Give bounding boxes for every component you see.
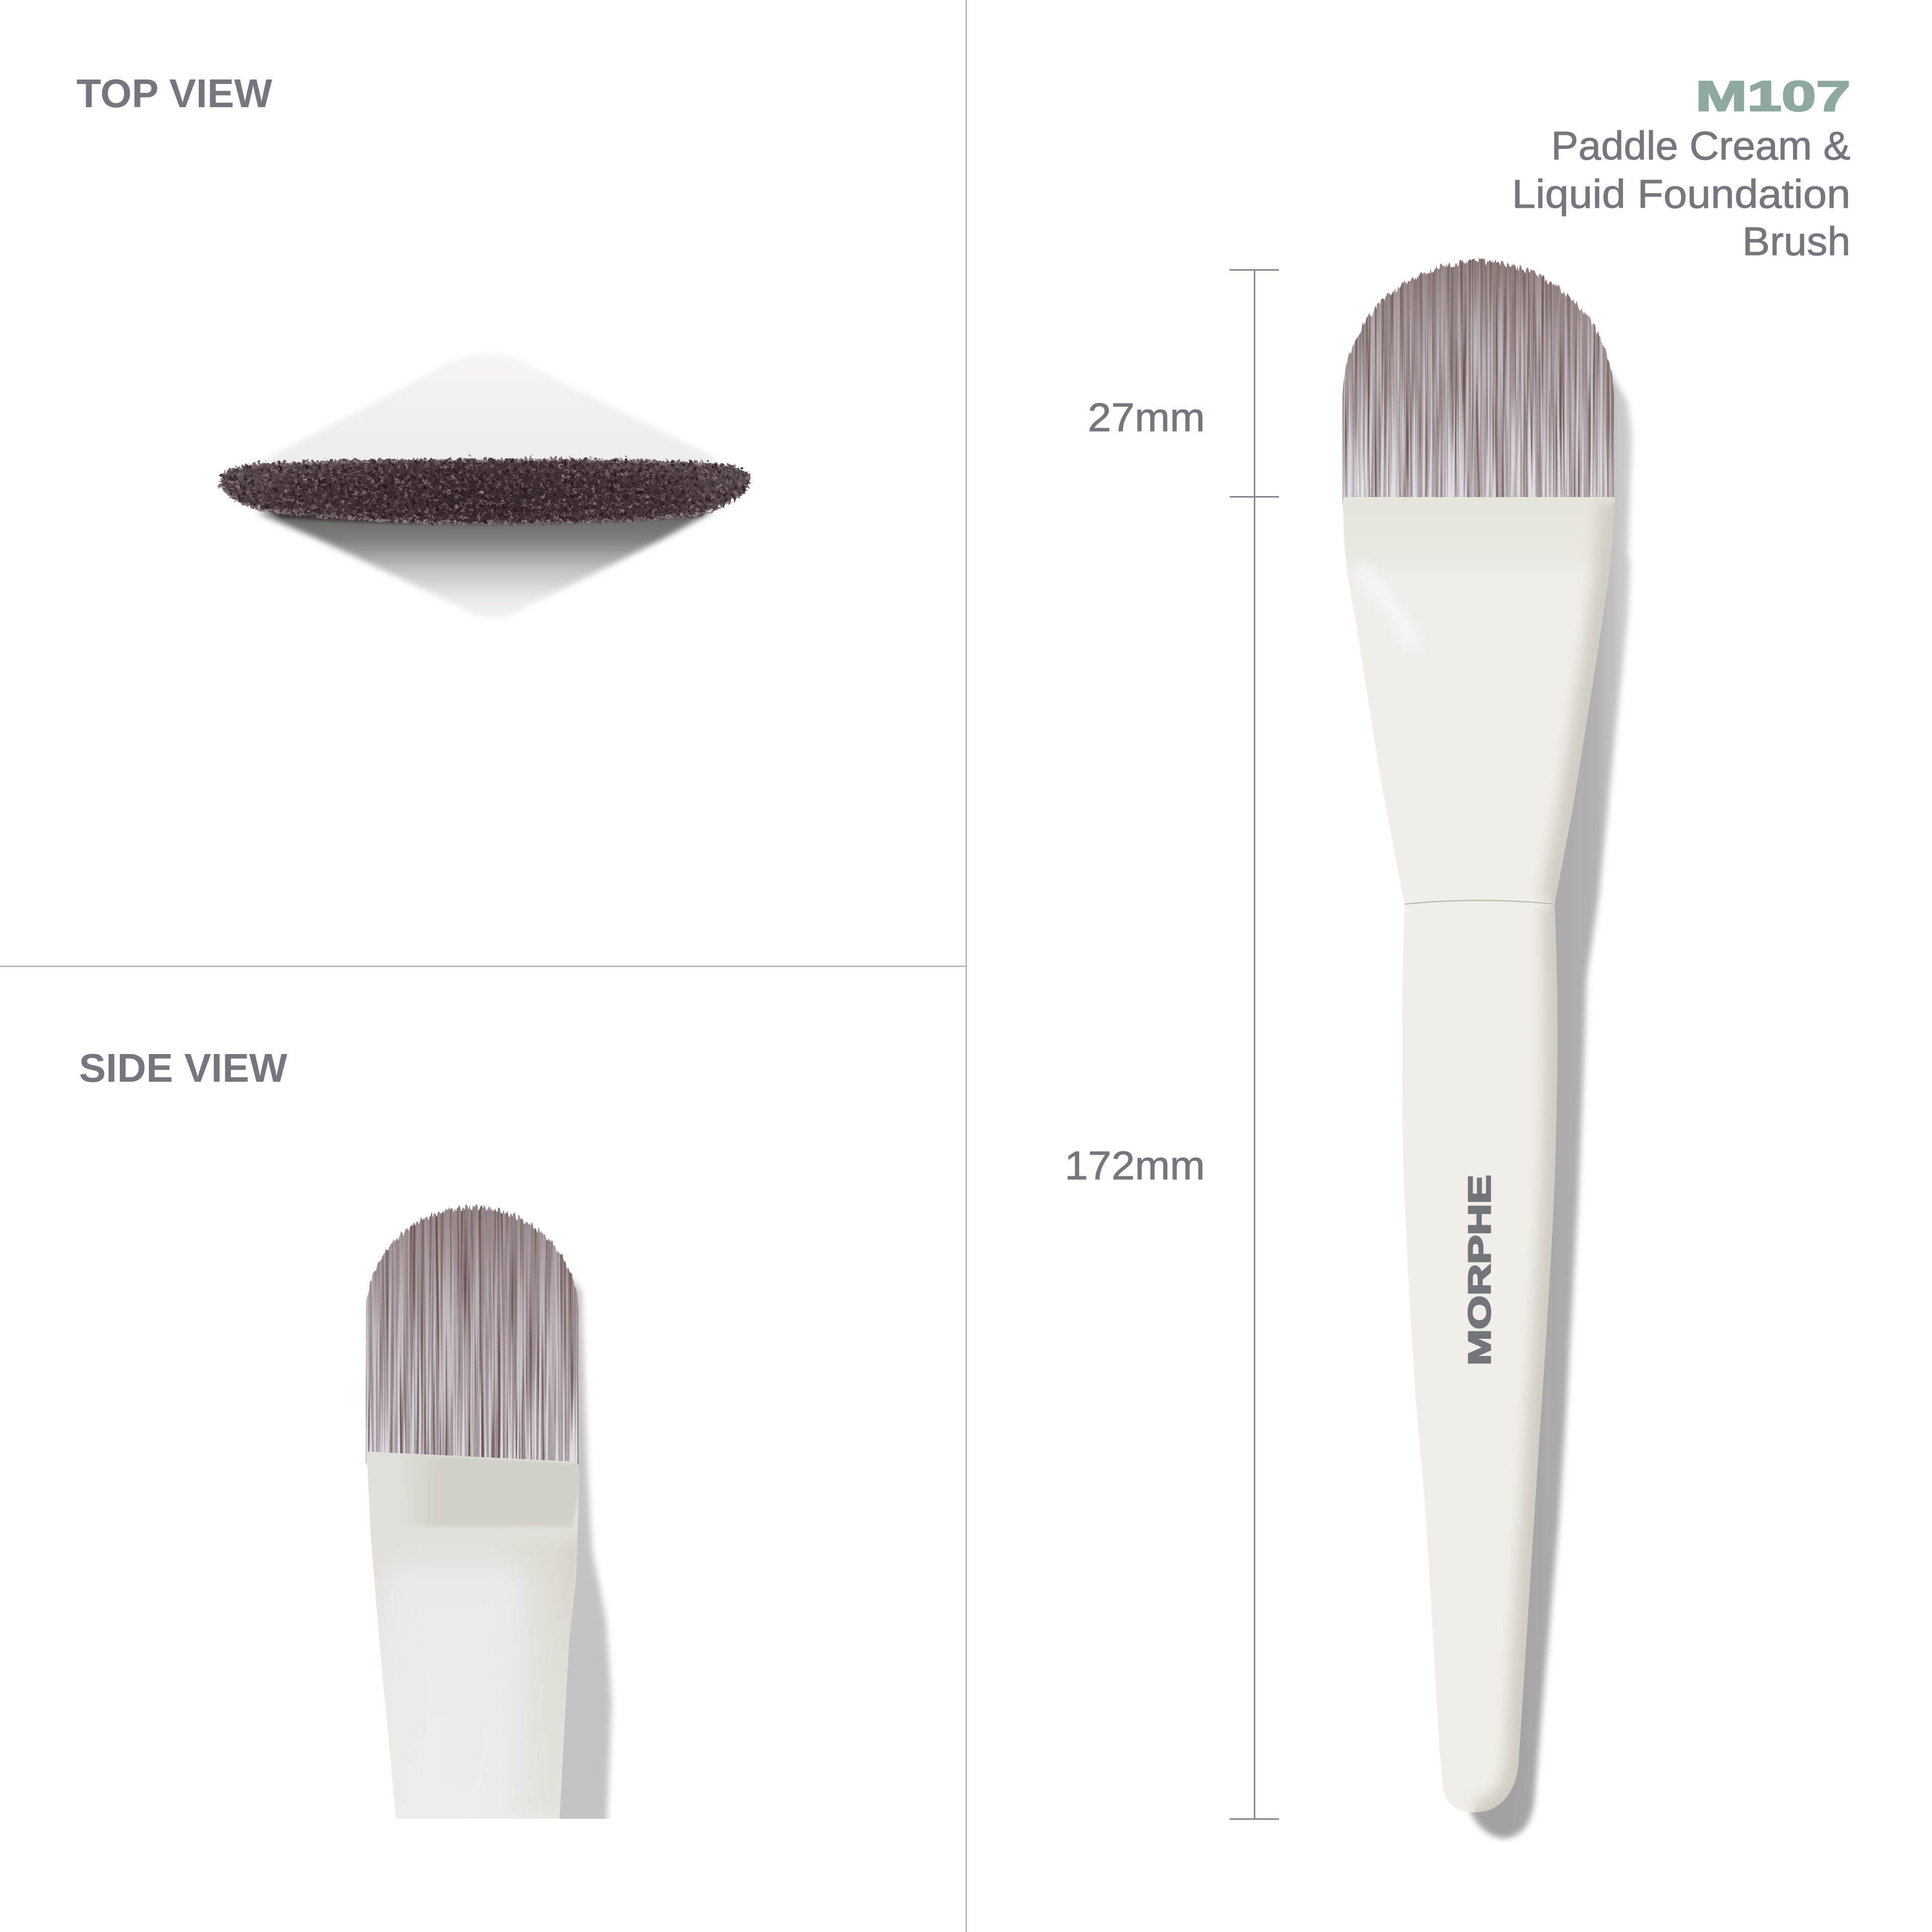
- product name: Brush: [1742, 219, 1850, 264]
- cast shadow: [1470, 367, 1632, 1838]
- product name: [1512, 123, 1850, 264]
- heading: side view: SIDE VIEW: [79, 1045, 287, 1090]
- ferrule top band shade: [1343, 497, 1615, 557]
- ferrule: [1343, 497, 1615, 904]
- handle right rim: [1476, 904, 1557, 1812]
- handle: [1402, 901, 1557, 1812]
- label: bristle length: 27mm: [1088, 395, 1205, 440]
- panel: top view of brush: [219, 354, 748, 618]
- ferrule body: [367, 1452, 580, 1819]
- panel divider: vertical: [965, 0, 967, 1932]
- dark edge below bristles: [262, 506, 709, 524]
- panel divider: horizontal: [0, 965, 966, 967]
- heading: top view: TOP VIEW: [76, 71, 272, 116]
- full brush with shadow: [1338, 259, 1632, 1838]
- ferrule soft light zone: [403, 1569, 520, 1634]
- dimension scale bracket: [1230, 269, 1279, 1820]
- ferrule right shading: [1557, 503, 1618, 904]
- cast shadow: [559, 1266, 615, 1819]
- handle right shading: [1476, 904, 1561, 1816]
- label: handle length: 172mm: [1065, 1143, 1205, 1188]
- lower shaded ferrule diamond: [257, 510, 715, 618]
- product code: M107: [1696, 72, 1850, 120]
- bristles: [362, 1202, 584, 1469]
- product name: Liquid Foundation: [1512, 172, 1850, 216]
- ferrule highlight: [1361, 569, 1414, 644]
- panel: side view of brush: [362, 1202, 612, 1841]
- ferrule recessed band: [418, 1456, 580, 1526]
- product name: Paddle Cream &: [1551, 123, 1850, 168]
- bristle head: [1338, 259, 1620, 501]
- handle logo: MORPHE: [1463, 1175, 1497, 1365]
- upper ferrule diamond: [254, 354, 714, 478]
- ferrule right side shade: [523, 1542, 577, 1817]
- ferrule right rim: [1555, 503, 1615, 904]
- ferrule and handle seam: [1405, 901, 1555, 904]
- flat bristle pad: [219, 458, 748, 521]
